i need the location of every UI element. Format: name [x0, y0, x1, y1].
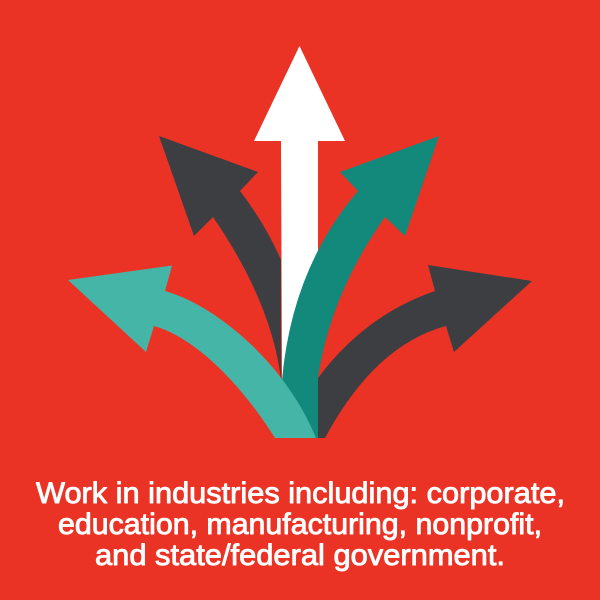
caption text: and state/federal government. [95, 539, 505, 572]
arrow: light teal left [68, 266, 316, 438]
caption text: Work in industries including: corporate, [36, 477, 565, 510]
arrow: dark upper left [159, 136, 281, 380]
arrows graphic [68, 46, 532, 438]
caption text [36, 477, 565, 572]
caption text: education, manufacturing, nonprofit, [58, 508, 542, 541]
arrow: green upper right [282, 136, 439, 438]
arrow: dark right [318, 265, 532, 438]
arrow: white centre [254, 46, 345, 380]
